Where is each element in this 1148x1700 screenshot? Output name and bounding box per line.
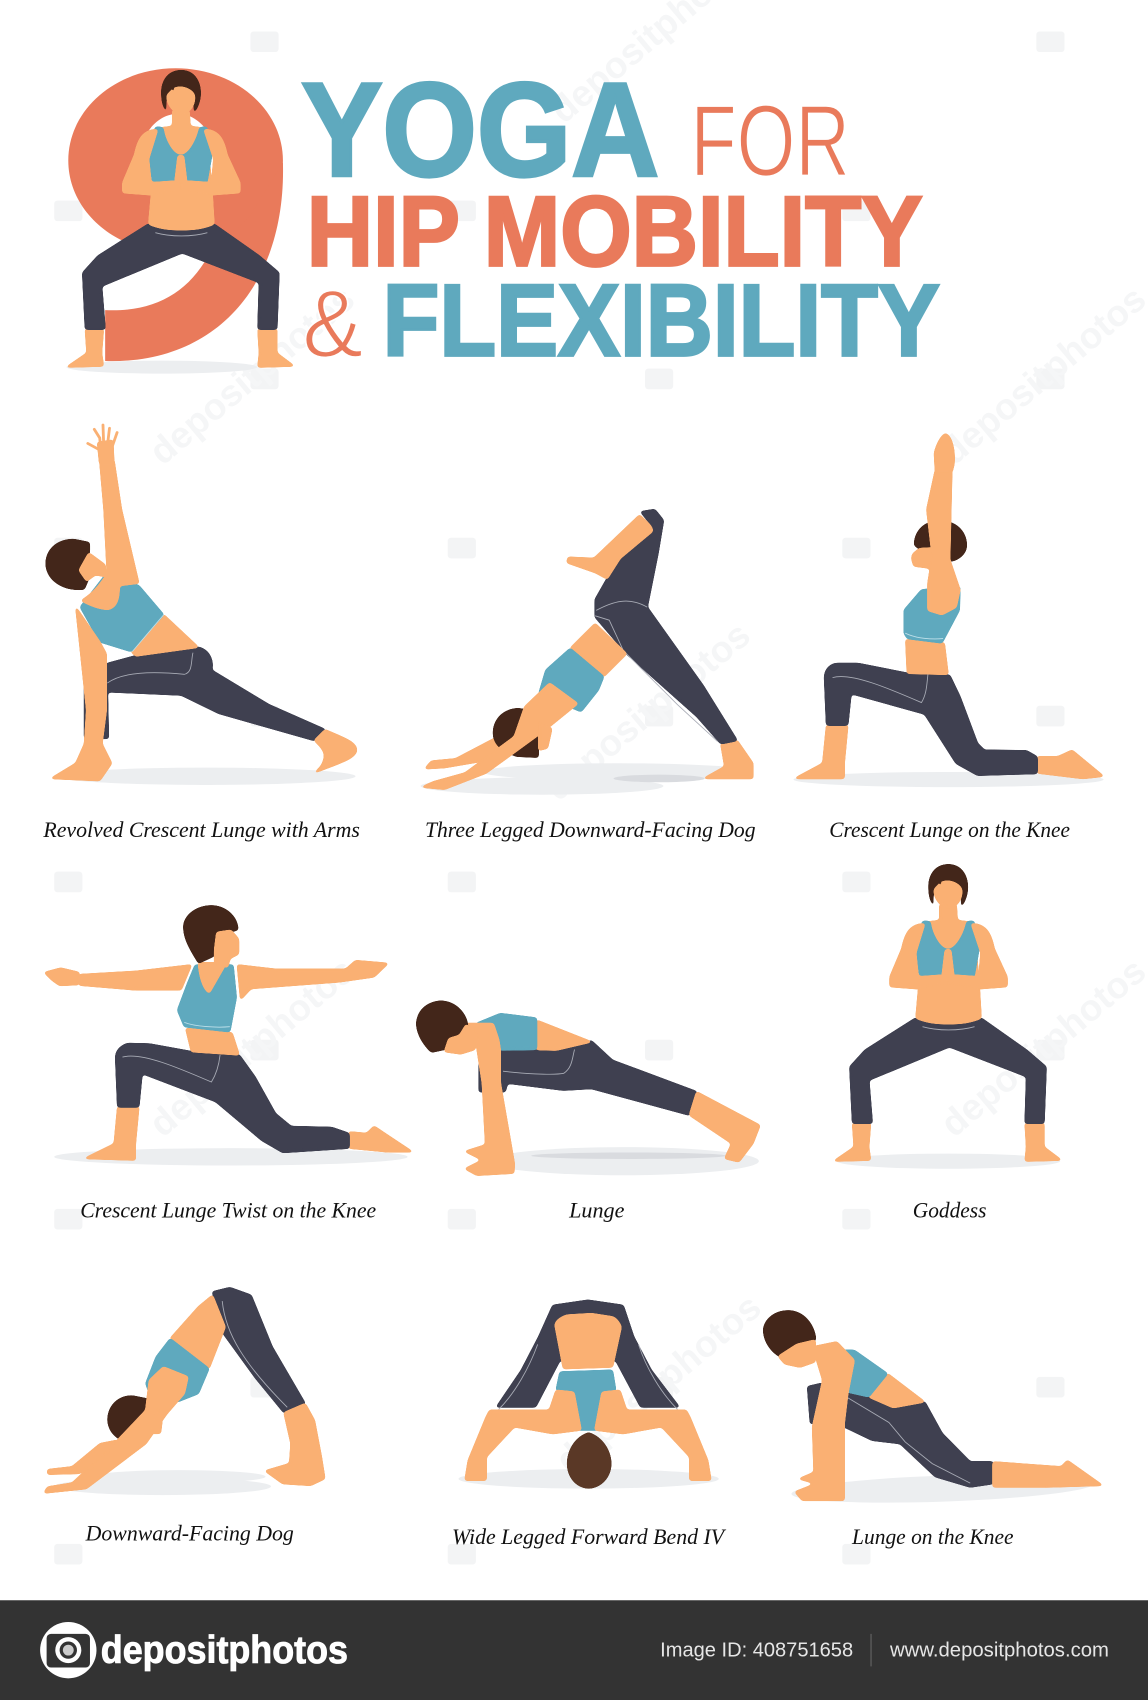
pose 2: three legged downward-facing dog (421, 510, 753, 795)
captions (42, 818, 1070, 1549)
watermark pattern: depositphotos (141, 950, 362, 1145)
title word: FOR: FOR (691, 86, 850, 198)
title (301, 56, 940, 378)
title word: YOGA: YOGA (301, 56, 659, 205)
caption: pose 8: Wide Legged Forward Bend IV (452, 1525, 727, 1549)
caption: pose 5: Lunge (568, 1199, 625, 1223)
footer banner (0, 1600, 1148, 1700)
pose 3: crescent lunge on the knee (794, 434, 1104, 787)
pose 6: goddess (834, 864, 1061, 1169)
website url: www.depositphotos.com (889, 1639, 1109, 1662)
watermark pattern: depositphotos (141, 278, 362, 472)
big number 9 (68, 68, 283, 361)
raised hand (88, 425, 117, 461)
pose 1: revolved crescent lunge with arms (46, 425, 357, 785)
header figure: goddess pose (66, 70, 294, 374)
watermark pattern: depositphotos (933, 278, 1148, 472)
pose 8: wide legged forward bend IV (459, 1300, 719, 1489)
pose 4: crescent lunge twist on the knee (44, 905, 412, 1165)
title ampersand: & (302, 272, 363, 378)
pose 7: downward-facing dog (44, 1288, 325, 1495)
caption: pose 3: Crescent Lunge on the Knee (829, 818, 1070, 842)
title line: HIP MOBILITY: HIP MOBILITY (307, 177, 923, 288)
watermark pattern: depositphotos (548, 1286, 769, 1481)
logo icon: camera (40, 1622, 96, 1678)
title line: FLEXIBILITY: FLEXIBILITY (383, 264, 940, 378)
pose 5: lunge (416, 1001, 760, 1175)
caption: pose 7: Downward-Facing Dog (85, 1522, 294, 1546)
caption: pose 2: Three Legged Downward-Facing Dog (425, 818, 756, 842)
caption: pose 4: Crescent Lunge Twist on the Knee (80, 1199, 377, 1223)
watermark pattern: depositphotos (933, 950, 1148, 1145)
watermark pattern: depositphotos (537, 614, 758, 808)
caption: pose 6: Goddess (913, 1199, 986, 1223)
pose 9: lunge on the knee (763, 1310, 1102, 1507)
caption: pose 9: Lunge on the Knee (851, 1525, 1014, 1549)
image id: Image ID: 408751658 (660, 1639, 853, 1662)
logo wordmark: depositphotos (101, 1629, 348, 1672)
caption: pose 1: Revolved Crescent Lunge with Arms (42, 818, 360, 842)
